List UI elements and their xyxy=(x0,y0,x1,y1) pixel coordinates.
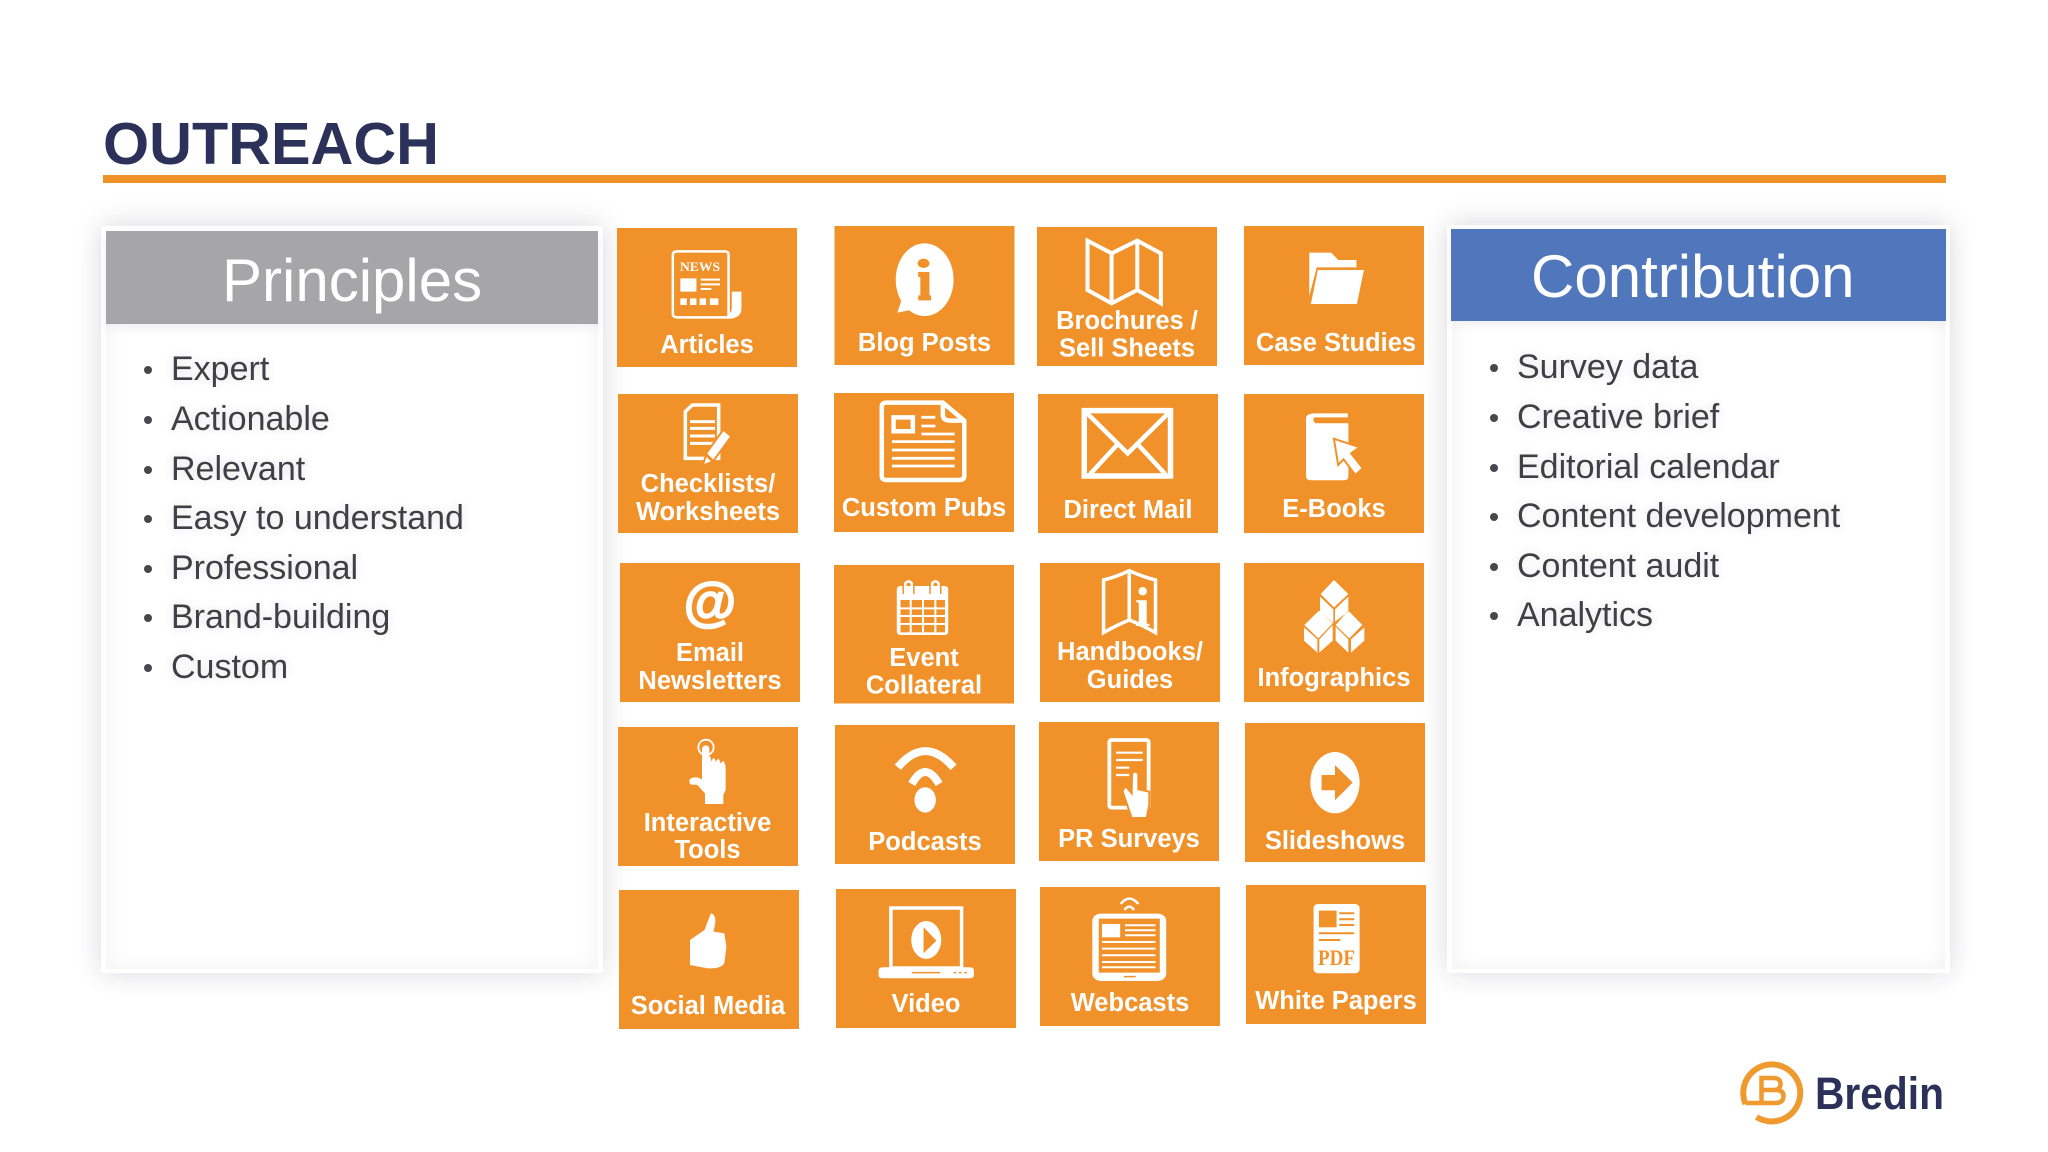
icon: tablet with signal xyxy=(1092,899,1166,981)
label: Custom Pubs xyxy=(842,494,1006,522)
tile: Handbooks/Guides xyxy=(1040,563,1220,702)
label: Checklists/ xyxy=(641,470,775,498)
icon: envelope xyxy=(1084,411,1171,476)
principles heading: Principles xyxy=(222,247,482,314)
principles list xyxy=(144,350,464,686)
icon: folder xyxy=(1309,253,1364,304)
icon: arrow circle xyxy=(1310,752,1360,813)
contribution list: Analytics xyxy=(1517,596,1653,634)
tile: Social Media xyxy=(619,890,799,1029)
label: White Papers xyxy=(1255,987,1417,1015)
icon: at sign: @ xyxy=(684,572,736,632)
label: E-Books xyxy=(1282,495,1386,523)
tile: Interactive Tools xyxy=(618,727,798,866)
tile: Video xyxy=(836,889,1016,1028)
tile: Brochures / Sell Sheets xyxy=(1037,227,1217,366)
contribution list: Survey data xyxy=(1517,348,1698,386)
label: Email xyxy=(676,639,744,667)
tile: Event Collateral xyxy=(834,565,1014,704)
icon: open guide book: i xyxy=(1135,577,1150,639)
icon: open guide book xyxy=(1104,571,1156,639)
label: Infographics xyxy=(1257,664,1411,692)
contribution header bar xyxy=(1451,229,1946,321)
label line 2: Guides xyxy=(1087,666,1173,694)
panel: principles xyxy=(101,226,603,973)
label: Blog Posts xyxy=(858,329,991,357)
contribution list: Content audit xyxy=(1517,547,1719,585)
tile: Articles xyxy=(617,228,797,367)
title: OUTREACH xyxy=(103,110,439,177)
label: PR Surveys xyxy=(1058,825,1200,853)
principles list: Custom xyxy=(171,648,288,686)
tile: Infographics xyxy=(1244,563,1424,702)
label: Webcasts xyxy=(1071,989,1189,1017)
icon: newspaper xyxy=(673,251,741,319)
principles list: Actionable xyxy=(171,400,330,438)
icon: calendar xyxy=(897,581,948,635)
label line 2: Newsletters xyxy=(638,667,782,695)
tile: Email Newsletters xyxy=(620,563,800,702)
label: Brochures / xyxy=(1056,307,1198,335)
icon: PDF document xyxy=(1314,904,1360,973)
label line 2: Tools xyxy=(674,836,741,864)
icon: tablet and hand xyxy=(1109,740,1149,818)
icon: info speech bubble xyxy=(896,243,954,316)
title underline xyxy=(103,175,1946,183)
label: Direct Mail xyxy=(1064,496,1192,524)
tile: Podcasts xyxy=(835,725,1015,864)
icon: newspaper: NEWS xyxy=(680,259,720,274)
contribution heading: Contribution xyxy=(1531,243,1855,310)
label: Interactive xyxy=(644,809,771,837)
panel: contribution xyxy=(1447,225,1950,973)
label: Handbooks/ xyxy=(1057,638,1203,666)
tile: PR Surveys xyxy=(1039,722,1219,861)
label line 2: Worksheets xyxy=(636,498,780,526)
principles list: Brand-building xyxy=(171,598,390,636)
principles list: Relevant xyxy=(171,450,305,488)
icon: e-book with cursor xyxy=(1306,413,1363,480)
label: Case Studies xyxy=(1256,329,1416,357)
icon: publication page xyxy=(882,403,964,480)
contribution list: Content development xyxy=(1517,497,1840,535)
tile: E-Books xyxy=(1244,394,1424,533)
principles list: Professional xyxy=(171,549,358,587)
tile: Slideshows xyxy=(1245,723,1425,862)
icon: checklist and pencil xyxy=(685,405,731,466)
tile: White Papers xyxy=(1246,885,1426,1024)
icon: stacked cubes xyxy=(1304,580,1364,653)
contribution list: Creative brief xyxy=(1517,398,1719,436)
logo: Bredin xyxy=(1743,1064,1944,1121)
tile: Checklists/Worksheets xyxy=(618,394,798,533)
icon: PDF document: PDF xyxy=(1318,945,1355,970)
principles header bar xyxy=(106,231,598,324)
tile: Blog Posts xyxy=(834,226,1014,365)
label line 2: Sell Sheets xyxy=(1059,334,1195,362)
label: Video xyxy=(892,990,960,1018)
principles list: Easy to understand xyxy=(171,499,464,537)
panel inner shade xyxy=(1452,230,1945,969)
label: Event xyxy=(889,644,959,672)
icon: touching hand xyxy=(689,740,726,804)
label: Podcasts xyxy=(868,828,982,856)
contribution list: Editorial calendar xyxy=(1517,448,1780,486)
contribution list xyxy=(1490,348,1840,634)
tile: Direct Mail xyxy=(1038,394,1218,533)
logo wordmark: Bredin xyxy=(1815,1068,1944,1119)
tile: Case Studies xyxy=(1244,226,1424,365)
tile: Webcasts xyxy=(1040,887,1220,1026)
panel inner shade xyxy=(106,231,598,969)
label line 2: Collateral xyxy=(866,672,982,700)
icon: laptop with play button xyxy=(879,908,974,978)
icon: thumbs up xyxy=(690,913,726,968)
label: Slideshows xyxy=(1265,827,1405,855)
icon: broadcast signal xyxy=(898,751,954,813)
label: Social Media xyxy=(631,992,786,1020)
label: Articles xyxy=(660,331,754,359)
logo mark xyxy=(1743,1064,1800,1121)
principles list: Expert xyxy=(171,350,269,388)
tile: Custom Pubs xyxy=(834,393,1014,532)
icon: folded map xyxy=(1087,241,1161,303)
